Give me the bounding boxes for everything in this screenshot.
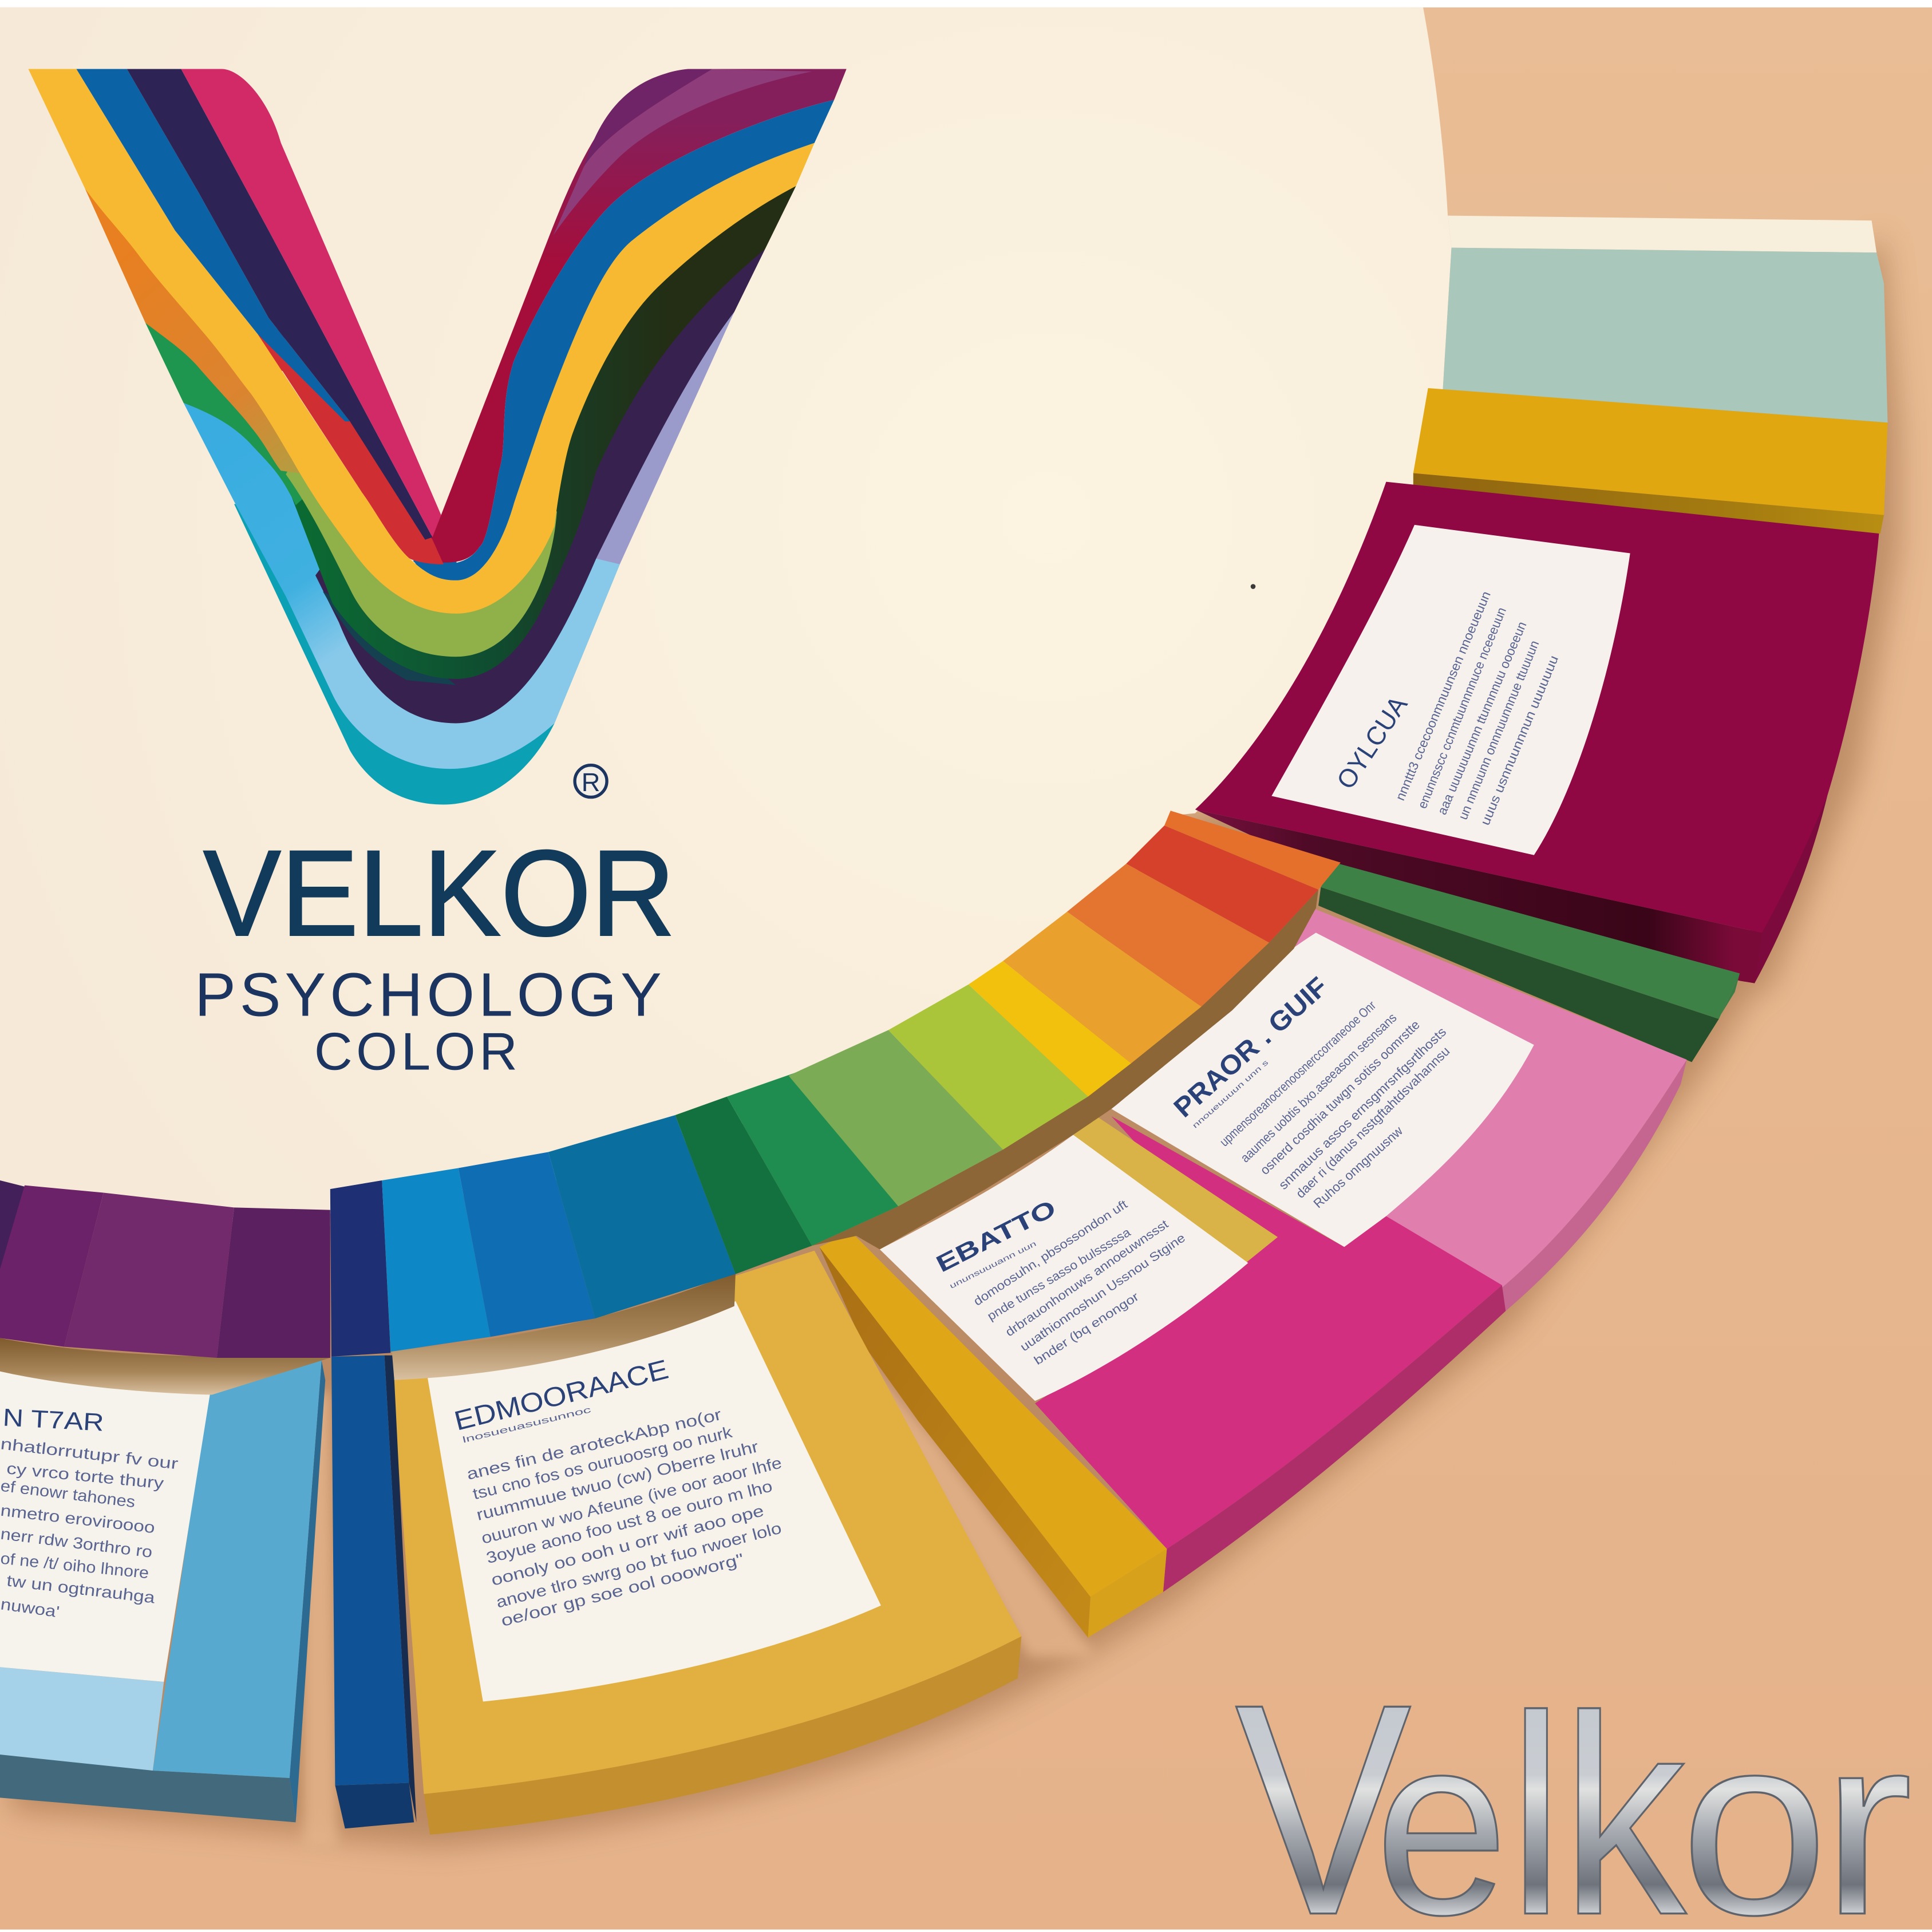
panel: magenta card [1035,1114,1506,1592]
blue card title: N T7AR [2,1405,104,1437]
gold card white note [428,1301,881,1701]
green segments [675,985,1088,1274]
gold card face [392,1251,1021,1794]
pink note body text: snmauus assos ernsgmrsnfgsrtlhosts [1276,1025,1449,1193]
crimson card body text: un nnnuunn onnnuunnnue ttuuuun [1456,638,1543,822]
gold card body text: ruummuue twuo (cw) Oberre lruhr [475,1437,761,1524]
crimson card side [1749,789,1827,983]
crimson card body text: enunnsscc ccnmtuunnnnuce nceeeuun [1415,605,1510,811]
blue card body text: nuwoa' [0,1594,61,1621]
panel: magenta card note [880,1135,1248,1401]
blue card body text: nhatlorrutupr fv our [0,1435,180,1473]
blue card body text: of ne /t/ oiho lhnore [0,1549,150,1582]
navy bar dark edge [385,1356,417,1822]
panel: navy bar [331,1356,417,1828]
ring inner shadow: blue side [392,1271,736,1380]
magenta note body text: uuathionnoshun Ussnou Stgine [1018,1231,1189,1355]
pink note body text: Ruhos onngnuusnw [1311,1124,1406,1211]
gold card body text: anove tlro swrg oo bt fuo rwoer lolo [494,1519,784,1611]
gold card body text: 3oyue aono foo ust 8 oe ouro m lho [484,1476,774,1567]
peach gaps between the cards [303,1325,1097,1848]
navy bar front [335,1783,414,1828]
panel: gold card [392,1251,1021,1835]
warm segments [969,811,1341,1097]
crimson card front edge [1195,809,1762,983]
gold card title: EDMOORAACE [451,1354,671,1436]
magenta note title: EBATTO [933,1196,1061,1278]
ring inner shadow: warm side [812,890,1318,1250]
magenta note body text: drbrauonhonuws annoeuwnssst [1003,1218,1172,1340]
blue card bottom edge [0,1752,296,1822]
pink card side [1502,1060,1687,1311]
brand name: VELKOR [203,824,675,961]
magenta card side [1163,1285,1506,1592]
small dot on cream [1251,584,1255,589]
magenta note body text: domoosuhn, pbsossondon uft [971,1198,1131,1309]
cream tab [1448,216,1876,252]
crimson card body text: aaa uuuuuuunnn ttunnnnuu oooeeun [1435,619,1530,817]
panel: rainbow color ring [0,811,1341,1395]
mustard flap [1073,1114,1278,1263]
gold card body text: anes fin de aroteckAbp no(or [465,1405,724,1483]
ring inner shadow: purple side [0,1338,330,1395]
registered mark: R [582,769,600,797]
magenta note body text: ununsuuuann uun [949,1241,1038,1291]
panel: mustard strip [819,1232,1167,1638]
panel: blue card [0,1360,325,1822]
panel: crimson card [1195,482,1879,983]
magenta note sheet [880,1135,1248,1401]
panel: pink card note [1111,933,1534,1247]
mustard strip side [819,1247,1091,1638]
pink card face [1111,909,1687,1287]
pink note body text [1192,998,1453,1211]
pink note body text: daer ri (danus nsstgftahtdsvahannsu [1293,1044,1453,1202]
mustard strip face [819,1232,1167,1597]
magenta note body text: pnde tunss sasso bulsssssa [986,1226,1134,1324]
blue card white note [0,1370,211,1682]
crimson card white note [1271,525,1630,855]
registered mark [575,765,607,797]
blue card body text: nmetro eroviroooo [0,1501,156,1537]
gold card body text: oonoly oo ooh u orr wif aoo ope [489,1501,766,1589]
panel: green bar [1318,863,1740,1062]
blue card body text: ef enowr tahones [0,1476,137,1511]
purple segments [0,1180,330,1358]
subtitle: psychology: PSYCHOLOGY [195,961,662,1029]
rainbow V logo [29,69,847,805]
blue card body text [0,1435,180,1621]
magenta note body text: bnder (bq enongor [1032,1290,1143,1368]
gold card body text: ouuron w wo Afeune (ive oor aoor lhfe [479,1453,784,1547]
crimson card body text: nnnttt3 ccecoonmnuunsen nnoeueuun [1393,589,1494,803]
green bar dark front [1318,887,1719,1062]
panel: stacked tabs top right [1413,216,1888,534]
cream circle panel [0,7,1452,1226]
pink note body text: nnoueuuuun unn s [1192,1060,1270,1131]
gold card subtitle: lnosueuasusunnoc [461,1405,593,1445]
green bar face [1321,863,1740,1019]
green bar end [1692,973,1740,1062]
blue card light strip [0,1667,164,1771]
gold card body text: tsu cno fos os ouruoosrg oo nurk [471,1423,734,1503]
sage tab [1443,248,1888,422]
crimson card body text [1393,589,1562,828]
gold tab edge [1413,473,1884,534]
blue card body text: nerr rdw 3orthro ro [0,1524,153,1561]
magenta note body text [949,1198,1189,1368]
pink note sheet [1111,933,1534,1247]
pink note body text: aaumes uobtis bxo.aseeasom sesnsans [1238,1011,1400,1166]
gold tab [1413,388,1888,515]
crimson card face [1195,482,1879,933]
blue card body text: cy vrco torte thury [6,1459,165,1492]
panel: pink card [1111,909,1687,1311]
pink note body text: osnerd cosdhia tuwgn sotiss oomrstte [1258,1018,1423,1178]
blue card right edge [290,1360,325,1822]
blue card body text: tw un ogtnrauhga [6,1571,157,1607]
mustard strip end [1088,1549,1167,1638]
magenta card face [1035,1116,1502,1549]
pink note body text: upmensoreanocrenoosnerccorraneooe Onr [1217,998,1380,1150]
gold card body text [465,1405,784,1630]
gold card side [424,1636,1021,1835]
subtitle: color: COLOR [314,1023,517,1082]
navy bar face [331,1356,409,1785]
blue segments [330,1115,736,1357]
gold card body text: oe/oor gp soe ool oooworg" [499,1550,746,1630]
blue card mid stripe [153,1360,322,1778]
crimson card body text: uuus usnnuunnnun uuuuuuu [1478,653,1562,828]
pink note title: PRAOR . GUIF [1168,971,1334,1123]
crimson card title: OYLCUA [1332,692,1413,795]
